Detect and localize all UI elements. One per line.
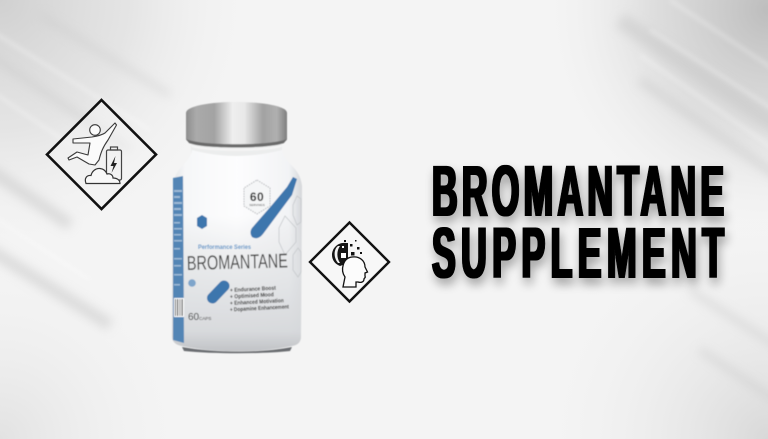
benefits list: + Endurance Boost <box>230 286 276 294</box>
person outline <box>68 123 116 165</box>
bottle contact shadow <box>182 347 292 353</box>
title: SUPPLEMENT <box>432 213 724 293</box>
label side panel with barcode <box>173 176 184 343</box>
head profile <box>343 257 368 287</box>
text: Performance Series: Performance Series <box>198 244 251 251</box>
open skull <box>332 243 348 266</box>
bottle body <box>172 150 302 351</box>
blue hexagon <box>197 215 207 229</box>
benefits list: + Optimised Mood <box>230 292 275 300</box>
benefits list: + Enhanced Motivation <box>230 298 285 307</box>
diamond frame <box>310 222 389 302</box>
small badge circle <box>188 279 196 287</box>
text: 60 caps: 60CAPS <box>188 312 211 323</box>
60 servings badge: SERVINGS <box>249 203 265 207</box>
battery icon <box>106 147 122 180</box>
bottle cap <box>186 102 287 151</box>
title: BROMANTANE <box>432 151 724 231</box>
benefits list: + Dopamine Enhancement <box>230 304 289 313</box>
60 servings badge: 60 <box>250 190 264 204</box>
60 servings badge <box>244 180 270 214</box>
title shadow: SUPPLEMENT <box>434 219 726 299</box>
particles <box>344 240 362 256</box>
blue capsule stripe <box>250 177 297 238</box>
title <box>432 151 724 293</box>
icon: jumping person with battery and cloud <box>47 100 156 209</box>
product bottle <box>172 102 302 353</box>
title shadow: BROMANTANE <box>434 157 726 237</box>
bottle neck <box>191 144 282 158</box>
icon: head with particles <box>310 222 389 302</box>
outlined hexagons <box>279 196 301 277</box>
text: product name: BROMANTANE <box>187 250 288 275</box>
cloud icon <box>85 168 120 184</box>
diamond frame <box>47 100 156 209</box>
title shadow <box>434 157 726 299</box>
blue capsule <box>212 286 224 298</box>
benefits list <box>230 286 289 313</box>
